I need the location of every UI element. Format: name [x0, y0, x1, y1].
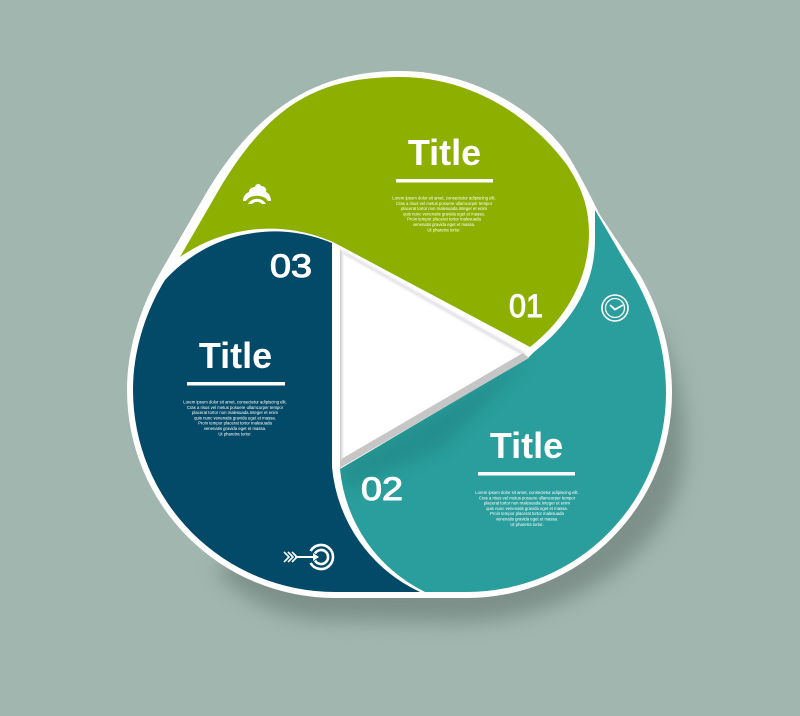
- panel 02: teal segment: [340, 210, 666, 592]
- rule 03: [187, 382, 285, 386]
- triangle shadow on teal: [340, 378, 503, 485]
- icon: cap: [243, 184, 271, 204]
- title 02: Title: [490, 425, 563, 466]
- icon: arrow and target: [284, 545, 333, 569]
- drop shadow: [215, 320, 684, 622]
- body text 02: venenatis gravida eget et massa.: [496, 516, 558, 522]
- panel 01: green segment: [180, 77, 589, 347]
- panel 03: navy segment: [133, 231, 420, 592]
- title 01: Title: [408, 132, 481, 173]
- body text 02: placerat tortor non malesuada.Integer et enim: [484, 501, 570, 506]
- rule 02: [478, 472, 575, 476]
- triangle left bevel: [340, 249, 344, 463]
- white outline silhouette: [127, 71, 672, 598]
- triangle top bevel: [340, 249, 527, 354]
- body text 02: quis nunc venenatis gravida eget et massa.: [486, 506, 568, 511]
- title 03: Title: [199, 335, 272, 376]
- body text 02: Cras a risus vel metus posuere ullamcorper tempor: [479, 495, 576, 500]
- body text 02: Ut pharetra tortor.: [510, 522, 544, 527]
- number 03: 03: [270, 248, 312, 284]
- body text 01: Cras a risus vel metus posuere ullamcorper tempor: [396, 201, 493, 206]
- body text 02: Proin tempor placerat tortor malesuada: [490, 511, 564, 516]
- body text 03: venenatis gravida eget et massa.: [204, 426, 266, 431]
- rule 01: [396, 179, 493, 182]
- icon: clock: [602, 295, 628, 321]
- body text 01: [392, 196, 496, 232]
- body text 01: venenatis gravida eget et massa.: [413, 222, 475, 227]
- body text 01: quis nunc venenatis gravida eget et massa.: [403, 211, 485, 216]
- body text 01: Ut pharetra tortor.: [427, 227, 461, 232]
- body text 01: Proin tempor placerat tortor malesuada: [407, 217, 481, 222]
- number 02: 02: [361, 471, 403, 507]
- body text 02: Lorem ipsum dolor sit amet, consectetur adipiscing elit.: [475, 490, 579, 495]
- body text 03: Lorem ipsum dolor sit amet, consectetur adipiscing elit.: [183, 400, 287, 404]
- body text 03: Cras a risus vel metus posuere ullamcorper tempor: [187, 405, 284, 410]
- body text 03: [183, 400, 287, 436]
- body text 01: placerat tortor non malesuada.Integer et enim: [401, 206, 487, 211]
- number 01: 01: [509, 288, 543, 324]
- body text 03: quis nunc venenatis gravida eget et massa.: [194, 415, 276, 420]
- body text 03: Proin tempor placerat tortor malesuada: [198, 421, 272, 426]
- body text 02: [475, 490, 579, 527]
- triangle bottom bevel: [340, 353, 529, 468]
- center triangle: [340, 249, 529, 468]
- body text 03: Ut pharetra tortor.: [218, 431, 252, 436]
- body text 01: Lorem ipsum dolor sit amet, consectetur adipiscing elit.: [392, 196, 496, 200]
- body text 03: placerat tortor non malesuada.Integer et enim: [192, 410, 278, 415]
